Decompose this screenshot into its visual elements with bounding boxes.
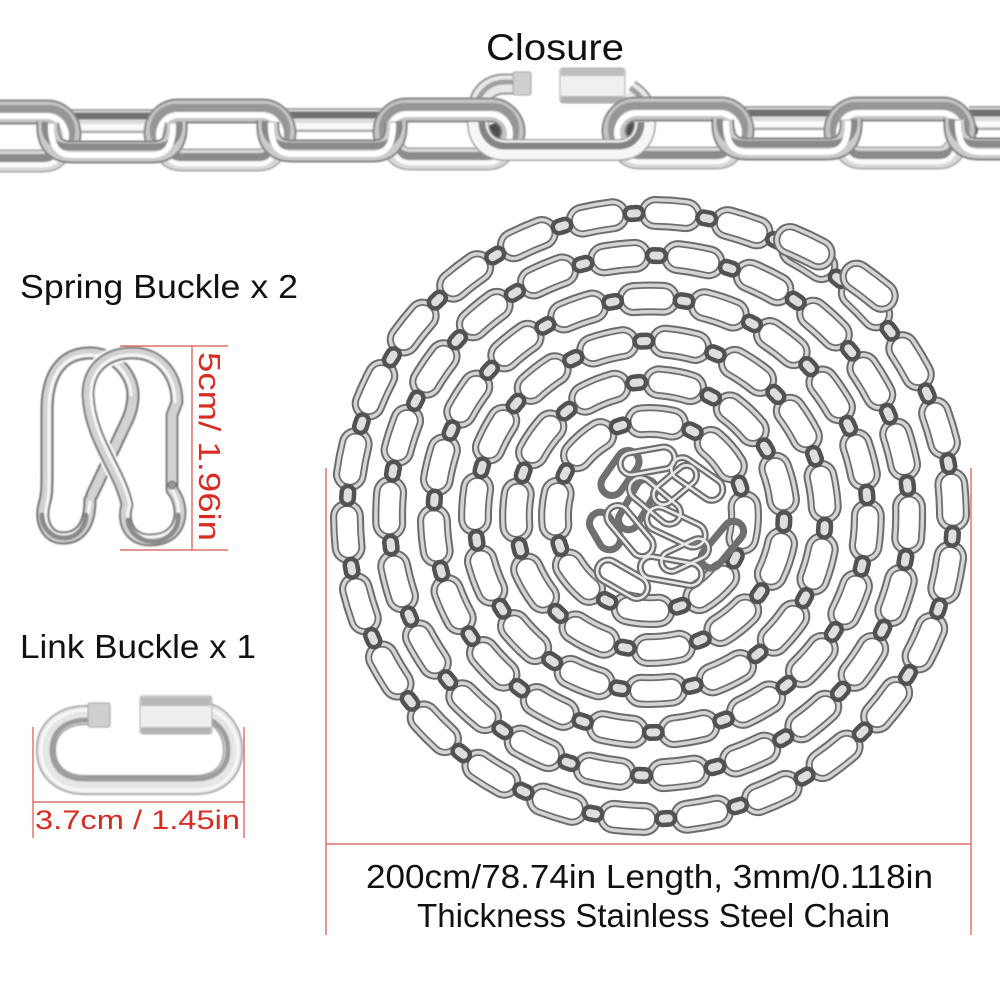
- chain coil: [292, 159, 1000, 872]
- coil ring 6: [516, 382, 784, 650]
- title: Closure: Closure: [486, 27, 624, 68]
- right carabiner: [88, 353, 180, 542]
- icon: link buckle: [41, 696, 238, 790]
- dimension: 5cm / 1.96in: [120, 346, 228, 550]
- dimension: 3.7cm / 1.45in: 3.7cm / 1.45in: [35, 805, 240, 835]
- caption line 2: Thickness Stainless Steel Chain: [417, 897, 890, 934]
- left carabiner: [42, 353, 133, 538]
- closure link: upper part and nut: [476, 68, 647, 122]
- caption line 1: 200cm/78.74in Length, 3mm/0.118in: [366, 858, 933, 895]
- dimension: 5cm / 1.96in: 5cm/ 1.96in: [192, 352, 227, 541]
- coil ring 2: [292, 159, 1000, 872]
- closure link: lower bar: [478, 122, 645, 150]
- coil ring 4: [455, 321, 845, 711]
- label: Link Buckle x 1: Link Buckle x 1: [20, 628, 256, 665]
- coil ring 3: [351, 215, 951, 816]
- coil center links: [585, 445, 748, 603]
- dimension: coil length: [326, 468, 971, 935]
- dimension: 3.7cm / 1.45in: [33, 727, 244, 838]
- link junction shadows: [41, 120, 978, 145]
- chain: horizontal chain with closure link: [0, 68, 1000, 165]
- coil tail: [790, 240, 900, 312]
- coil ring 1: [308, 174, 992, 858]
- coil ring 5: [491, 357, 809, 675]
- label: Spring Buckle x 2: Spring Buckle x 2: [20, 268, 298, 305]
- icon: spring buckles: [42, 353, 180, 542]
